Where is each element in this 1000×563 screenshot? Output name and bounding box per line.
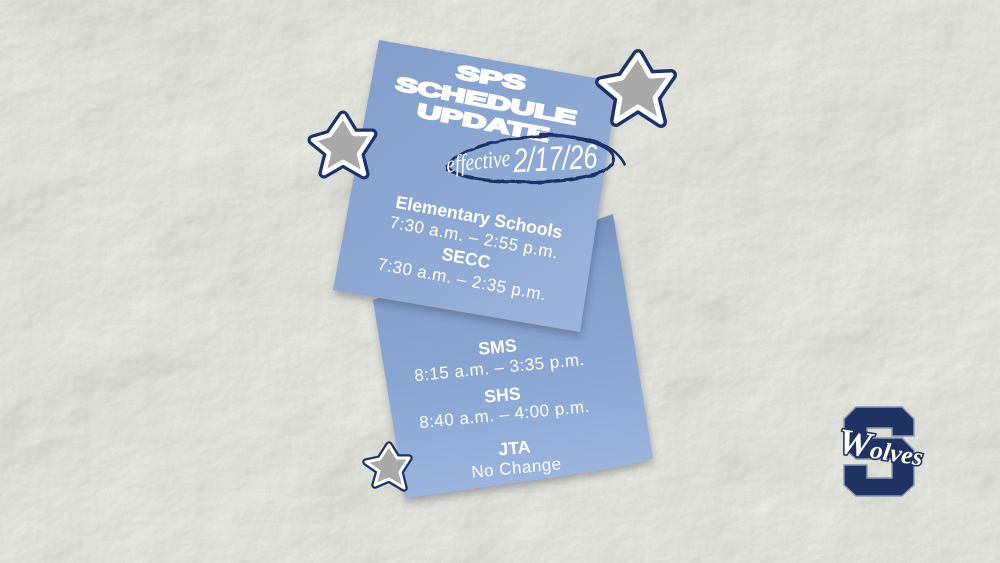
title line: UPDATE: UPDATE xyxy=(415,101,551,147)
title line: SPS: SPS xyxy=(455,62,527,95)
SECC hours: 7:30 a.m. – 2:35 p.m. xyxy=(376,255,548,305)
SECC heading: SECC xyxy=(440,244,492,272)
logo letter S xyxy=(844,407,914,496)
SHS hours: 8:40 a.m. – 4:00 p.m. xyxy=(418,397,591,432)
hand-drawn ellipse xyxy=(447,134,625,182)
panel: upper sticky note xyxy=(333,40,625,332)
panel: lower sticky note xyxy=(373,214,653,498)
Elementary Schools hours: 7:30 a.m. – 2:55 p.m. xyxy=(388,213,560,263)
title line: SCHEDULE: SCHEDULE xyxy=(394,74,578,129)
SHS heading: SHS xyxy=(483,383,522,407)
SMS heading: SMS xyxy=(477,335,518,359)
logo wordmark: Wolves xyxy=(835,421,926,474)
icon: small star xyxy=(366,445,409,488)
JTA status: No Change xyxy=(471,454,562,482)
SMS hours: 8:15 a.m. – 3:35 p.m. xyxy=(413,350,586,385)
icon: medium star xyxy=(313,116,372,174)
logo: S Wolves xyxy=(835,407,926,496)
effective date: 2/17/26 xyxy=(512,138,598,180)
JTA heading: JTA xyxy=(497,437,532,460)
effective date xyxy=(445,138,598,180)
icon: large star xyxy=(601,55,671,122)
effective date: effective xyxy=(445,146,512,178)
Elementary Schools heading: Elementary Schools xyxy=(394,192,564,242)
